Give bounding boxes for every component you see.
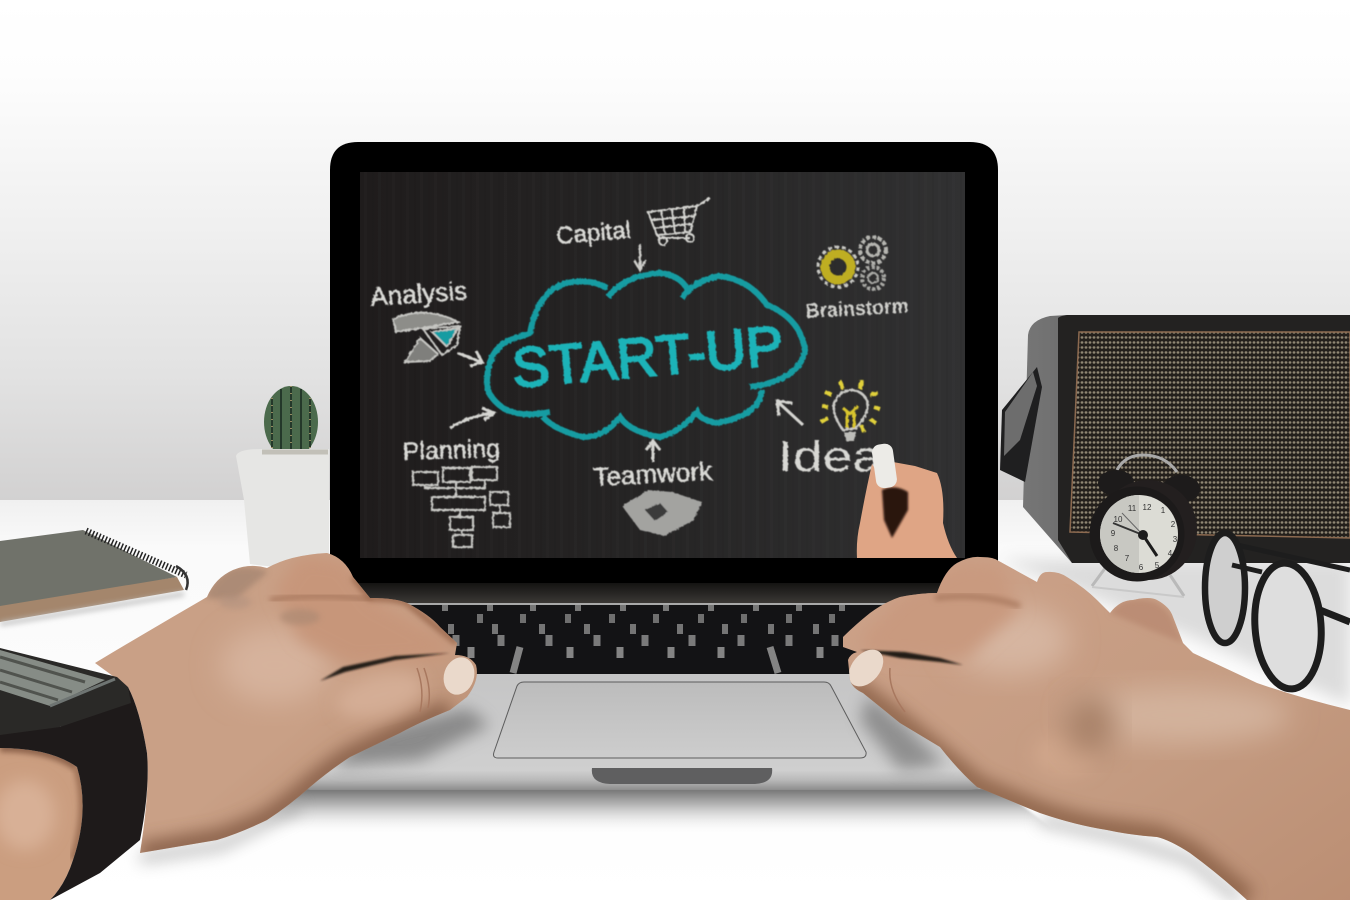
arrow: planning to cloud (450, 408, 494, 428)
clock numbers: 10 (1114, 515, 1123, 524)
plant pot with cactus (236, 386, 329, 567)
thumb finger gap (860, 650, 963, 665)
clock numbers: 4 (1168, 549, 1173, 558)
desk shade on right side (1000, 560, 1350, 705)
front lip (304, 770, 985, 790)
right thumbnail (849, 650, 884, 686)
arrow: capital to cloud (634, 244, 646, 270)
clock body (1099, 480, 1197, 580)
left forearm (0, 748, 83, 900)
wall background (0, 0, 1350, 500)
left hand (95, 553, 477, 853)
eyeglasses (1205, 533, 1350, 691)
icon: flowchart (413, 467, 510, 547)
hand (857, 462, 957, 558)
clock numbers (1111, 503, 1178, 572)
smartwatch (0, 648, 148, 900)
tendon shadow (1064, 695, 1116, 755)
lower edge shade (140, 710, 450, 853)
icon: shopping cart (648, 198, 710, 245)
cloud (487, 273, 805, 437)
hinge (340, 583, 990, 603)
Teamwork: Teamwork (593, 456, 714, 492)
screen bezel (330, 142, 998, 583)
START-UP: START-UP (509, 313, 786, 400)
clock numbers: 3 (1173, 535, 1178, 544)
thumb highlight (340, 671, 424, 720)
rear finger shade (205, 567, 268, 600)
Brainstorm: Brainstorm (805, 295, 909, 323)
watch face (0, 650, 105, 706)
notebook cover (0, 530, 177, 606)
Capital: Capital (555, 217, 632, 250)
lower edge shade (850, 685, 1247, 900)
thumb finger gap (320, 653, 450, 681)
thumb crease (890, 668, 905, 712)
fingers tint (890, 557, 1019, 660)
Analysis: Analysis (369, 275, 468, 312)
finger top edge (353, 577, 457, 643)
laptop (304, 142, 998, 790)
arrow: analysis to cloud (458, 351, 482, 366)
clock legs (1092, 567, 1184, 596)
clock numbers: 1 (1161, 506, 1166, 515)
icon: pie chart (393, 313, 460, 362)
chalkboard screen (360, 172, 965, 558)
clock bells (1098, 470, 1134, 496)
thumb creases (417, 668, 429, 712)
watch case (0, 648, 131, 735)
rear finger boundary (935, 596, 1020, 606)
clock numbers: 11 (1128, 504, 1137, 513)
clock handle (1117, 455, 1177, 472)
clock numbers: 7 (1125, 554, 1130, 563)
laptop deck (320, 603, 975, 770)
finger gap (882, 487, 908, 538)
key gaps (445, 605, 842, 611)
cactus (264, 386, 318, 458)
back of hand highlight (220, 627, 330, 703)
chalk drawings (369, 198, 909, 547)
arrow: idea to cloud (777, 401, 803, 425)
icon: gears (818, 237, 886, 289)
desk surface (0, 500, 1350, 900)
clock numbers: 2 (1171, 520, 1176, 529)
clock numbers: 12 (1143, 503, 1152, 512)
clock numbers: 8 (1114, 544, 1119, 553)
clock numbers: 6 (1139, 563, 1144, 572)
clock numbers: 9 (1111, 529, 1116, 538)
Planning: Planning (402, 435, 500, 466)
chalk (871, 443, 898, 489)
speaker handle (1000, 367, 1042, 482)
icon: handshake (622, 490, 702, 536)
left thumbnail (444, 657, 474, 695)
pot (236, 449, 329, 567)
Idea: Idea (778, 433, 882, 481)
hand highlights (950, 605, 1070, 675)
speaker (1000, 315, 1350, 563)
speaker grille (1070, 332, 1350, 538)
icon: light bulb (821, 380, 880, 441)
notebook shadow (0, 594, 184, 624)
clock numbers: 5 (1155, 561, 1160, 570)
notebook edge (0, 577, 184, 622)
front notch (592, 768, 772, 784)
notebook (0, 530, 188, 624)
right hand (835, 545, 1350, 900)
watch strap (0, 687, 148, 900)
keyboard (385, 603, 925, 674)
fingers tint (282, 553, 436, 661)
knuckles (280, 609, 320, 625)
hand shadows on deck (333, 695, 945, 770)
desk shadow under laptop and hands (140, 788, 1240, 900)
right lens (1251, 561, 1325, 691)
left lens (1205, 533, 1245, 643)
rear finger shade (1110, 599, 1183, 643)
temple arms (1237, 545, 1350, 570)
bridge (1232, 565, 1262, 572)
clock hands (1143, 535, 1157, 556)
trackpad (494, 682, 866, 758)
notebook spiral (86, 531, 186, 575)
rear finger boundary (270, 596, 372, 600)
arrow: teamwork to cloud (646, 441, 660, 462)
hand with chalk (857, 443, 957, 558)
alarm clock (1090, 455, 1200, 597)
speaker body (1023, 315, 1350, 563)
